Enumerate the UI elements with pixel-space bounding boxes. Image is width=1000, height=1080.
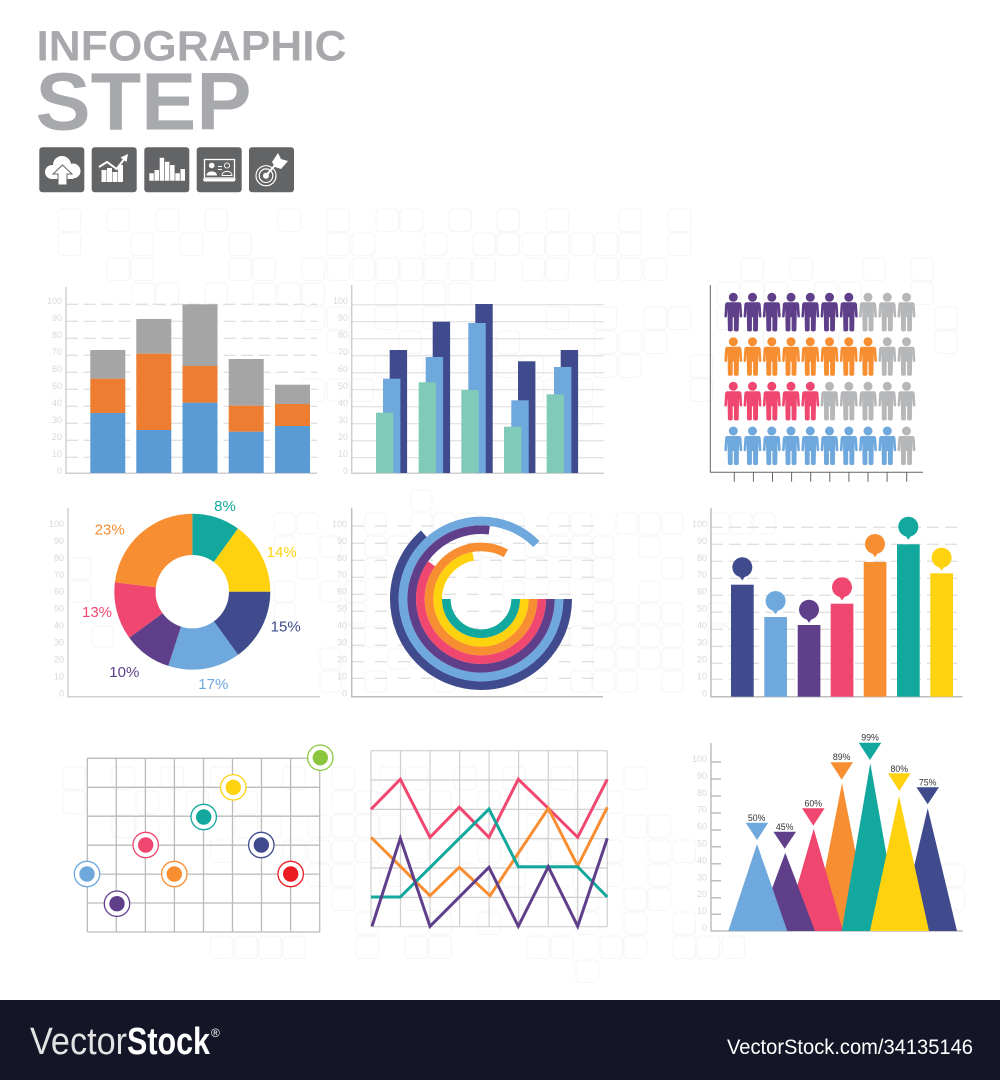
point navy — [249, 832, 274, 858]
axis labels: 50 — [337, 604, 347, 614]
axis labels — [47, 296, 62, 476]
axis labels: 70 — [337, 570, 347, 580]
axis labels: 100 — [333, 296, 348, 306]
axis labels: 10 — [697, 672, 707, 682]
bar pink — [831, 577, 853, 697]
axis labels: 100 — [49, 519, 64, 529]
chart: overlapping bars — [333, 285, 604, 476]
percent labels: 60% — [804, 798, 822, 808]
point pink — [133, 832, 158, 858]
axis labels — [332, 519, 347, 698]
footer image id: VectorStock.com/34135146 — [727, 1036, 973, 1059]
concentric arcs — [394, 521, 568, 686]
axis labels: 100 — [332, 519, 347, 529]
percent labels: 45% — [776, 822, 794, 832]
donut labels: 8% — [214, 498, 236, 515]
axis labels: 70 — [697, 570, 707, 580]
line purple — [372, 838, 607, 926]
line orange — [371, 807, 607, 896]
donut labels: 15% — [271, 618, 301, 636]
axis labels: 20 — [52, 432, 62, 442]
axis labels: 10 — [697, 906, 707, 916]
axis labels: 100 — [692, 754, 707, 764]
donut labels — [82, 498, 301, 693]
point red — [278, 861, 303, 887]
axis labels — [49, 519, 64, 698]
axis labels: 0 — [702, 923, 707, 933]
axis labels: 0 — [343, 466, 348, 476]
bar 1 — [90, 350, 125, 473]
group 2 — [419, 322, 450, 473]
point teal — [191, 804, 216, 830]
percent labels: 99% — [861, 732, 879, 742]
axis labels: 20 — [697, 889, 707, 899]
axis labels: 70 — [697, 805, 707, 815]
axis labels: 30 — [697, 872, 707, 882]
triangles — [728, 763, 957, 931]
group 3 — [461, 304, 493, 473]
icon: growth chart — [92, 147, 137, 192]
percent labels: 75% — [919, 777, 937, 787]
bar 4 — [229, 359, 264, 473]
axis labels: 0 — [702, 688, 707, 698]
donut labels: 23% — [95, 522, 125, 538]
axis labels: 60 — [697, 822, 707, 832]
axis labels: 30 — [697, 638, 707, 648]
axis labels: 90 — [337, 536, 347, 546]
percent labels: 89% — [833, 752, 851, 762]
group 4 — [504, 361, 535, 473]
axis labels: 30 — [338, 415, 348, 425]
axis labels: 80 — [697, 788, 707, 798]
bar 5 — [275, 385, 310, 473]
axis labels: 60 — [338, 364, 348, 374]
axis labels — [692, 519, 707, 698]
title: INFOGRAPHIC — [36, 23, 346, 71]
bar purple — [798, 600, 820, 697]
axis labels: 60 — [54, 587, 64, 597]
bar teal — [897, 517, 920, 697]
axis labels: 10 — [337, 672, 347, 682]
chart: stacked bars — [47, 287, 317, 476]
axis labels: 100 — [692, 519, 707, 529]
axis labels: 40 — [52, 398, 62, 408]
point orange — [162, 861, 187, 887]
footer logo: ® — [211, 1026, 220, 1040]
axis labels: 10 — [338, 449, 348, 459]
axis labels: 50 — [697, 838, 707, 848]
footer logo: Stock — [127, 1021, 211, 1063]
chart: triangle peaks — [692, 732, 963, 933]
people row: blue — [724, 426, 915, 465]
chart: scatter plot — [74, 745, 333, 932]
line teal — [371, 809, 607, 897]
bar yellow — [930, 548, 953, 697]
people row: purple — [724, 293, 915, 331]
icon: laptop video call — [197, 147, 242, 192]
axis labels: 30 — [52, 415, 62, 425]
people row: orange — [724, 337, 915, 376]
people row: pink — [724, 382, 915, 420]
bar light blue — [764, 591, 787, 697]
bar 3 — [182, 304, 218, 473]
axis labels: 0 — [342, 688, 347, 698]
percent labels: 80% — [890, 764, 908, 774]
axis labels: 20 — [54, 655, 64, 665]
axis labels: 50 — [52, 381, 62, 391]
axis labels: 40 — [337, 621, 347, 631]
bar navy — [731, 557, 754, 697]
chart: pin bars — [692, 508, 963, 698]
axis labels: 40 — [697, 855, 707, 865]
point purple — [104, 891, 130, 916]
axis labels: 80 — [338, 330, 348, 340]
axis labels: 30 — [54, 638, 64, 648]
point yellow — [221, 775, 246, 800]
axis labels: 80 — [54, 553, 64, 563]
donut labels: 13% — [82, 604, 112, 621]
axis labels: 40 — [338, 398, 348, 408]
bar 2 — [136, 319, 171, 473]
footer logo: Vector — [30, 1021, 127, 1063]
axis labels — [692, 754, 707, 933]
axis labels — [333, 296, 348, 476]
donut labels: 17% — [198, 676, 228, 693]
axis labels: 80 — [337, 553, 347, 563]
axis labels: 50 — [54, 604, 64, 614]
percent labels: 50% — [748, 813, 766, 823]
axis labels: 60 — [52, 364, 62, 374]
axis labels: 90 — [338, 313, 348, 323]
icon: cloud upload — [39, 147, 84, 192]
title: STEP — [36, 56, 251, 147]
background tile pattern, bottom row — [63, 767, 964, 982]
axis labels: 10 — [52, 449, 62, 459]
title — [36, 23, 346, 147]
point light blue — [74, 861, 100, 887]
axis labels: 0 — [57, 466, 62, 476]
axis labels: 50 — [697, 604, 707, 614]
axis labels: 70 — [54, 570, 64, 580]
point green — [308, 745, 333, 770]
footer bar — [0, 1000, 1000, 1080]
axis labels: 40 — [54, 621, 64, 631]
background tile pattern, middle row — [70, 490, 775, 692]
axis labels: 100 — [47, 296, 62, 306]
axis labels: 70 — [52, 347, 62, 357]
axis labels: 20 — [338, 432, 348, 442]
axis labels: 40 — [697, 621, 707, 631]
chart: people pictogram — [710, 285, 923, 482]
group 5 — [547, 350, 578, 473]
donut labels: 14% — [267, 544, 297, 561]
axis labels: 60 — [337, 587, 347, 597]
axis labels: 0 — [59, 688, 64, 698]
axis labels: 20 — [697, 655, 707, 665]
footer logo — [30, 1021, 220, 1063]
axis labels: 80 — [697, 553, 707, 563]
axis labels: 10 — [54, 672, 64, 682]
line pink — [371, 779, 607, 837]
icon: target with arrow — [249, 147, 294, 192]
axis labels: 60 — [697, 587, 707, 597]
axis labels: 90 — [697, 771, 707, 781]
bar orange — [864, 534, 886, 697]
chart: line graph — [371, 751, 607, 927]
donut labels: 10% — [109, 664, 139, 681]
background tile pattern — [58, 209, 958, 426]
donut slices — [114, 514, 270, 670]
axis labels: 50 — [338, 381, 348, 391]
axis labels: 90 — [52, 313, 62, 323]
chart: donut — [49, 498, 320, 698]
percent labels — [748, 732, 937, 832]
axis labels: 20 — [337, 655, 347, 665]
axis labels: 90 — [697, 536, 707, 546]
chart: radial arcs — [332, 508, 605, 698]
axis labels: 70 — [338, 347, 348, 357]
axis labels: 30 — [337, 638, 347, 648]
group 1 — [376, 350, 407, 473]
axis labels: 90 — [54, 536, 64, 546]
axis labels: 80 — [52, 330, 62, 340]
markers — [746, 743, 939, 849]
icon: bar chart — [144, 147, 189, 192]
